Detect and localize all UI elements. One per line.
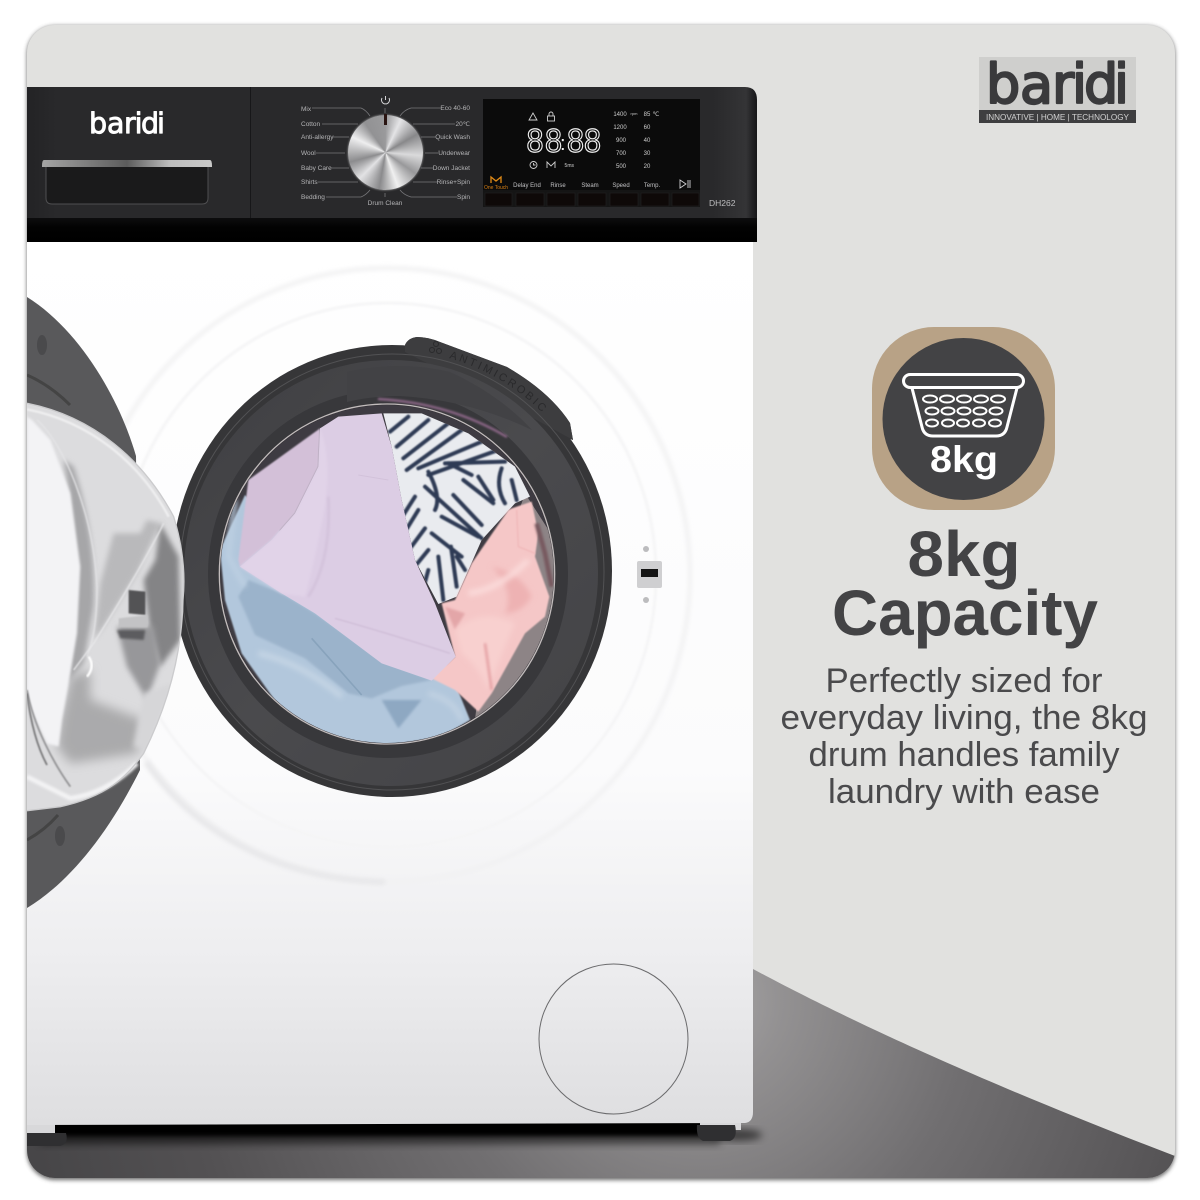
time digits: 8 [567,122,584,159]
logo tagline: INNOVATIVE | HOME | TECHNOLOGY [986,113,1130,122]
programme labels: Eco 40-60 [440,105,470,112]
programme labels: Anti-allergy [301,134,334,141]
icon: power [382,96,390,104]
speed values: 500 [616,164,627,170]
antimicrobic label: ANTIMICROBIC [449,352,546,411]
machine feet [27,1123,741,1146]
time digits: : [560,133,566,155]
machine body [27,240,753,1125]
icon: one touch [491,177,501,183]
description text: drum handles family [808,736,1120,774]
speed values: 30 [644,151,651,157]
programme lines [312,108,457,197]
heading [832,518,1098,649]
programme labels: Drum Clean [368,200,403,207]
basket [904,374,1024,436]
display icons [529,112,555,168]
model number: DH262 [709,198,736,208]
speed values [565,111,660,170]
programme labels: Bedding [301,194,325,201]
time digits: 8 [584,122,601,159]
programme labels: Mix [301,106,312,113]
floor curve [27,969,1175,1178]
glass door [27,403,184,811]
description text: Perfectly sized for [826,662,1102,700]
programme labels [301,105,471,207]
button labels: One Touch [484,185,508,191]
detergent drawer [42,160,212,204]
description text [780,662,1148,811]
speed values: 5ms [565,163,574,169]
programme labels: Cotton [301,121,321,128]
icon: start pause [680,180,690,188]
speed values: 20 [644,164,651,170]
logo wordmark: baridi [986,53,1129,116]
programme labels: Baby Care [301,165,332,172]
speed values: ℃ [653,112,660,118]
door interior reflections [57,460,180,763]
programme labels: Rinse+Spin [437,179,470,186]
speed values: 60 [644,125,651,131]
lavender garment [238,413,456,681]
time digits: 8 [545,122,562,159]
brand logo [979,53,1136,123]
description text: everyday living, the 8kg [780,699,1148,737]
button labels: Steam [581,183,599,189]
programme labels: Shirts [301,179,318,186]
speed values: rpm [631,111,638,116]
door gasket [176,337,612,797]
service hatch [539,964,688,1114]
touch buttons [485,193,699,206]
speed values: 700 [616,151,627,157]
button labels: Rinse [550,183,566,189]
control dial [348,115,423,190]
panel brand: baridi [89,107,165,140]
striped shirt [383,413,530,604]
programme labels: Quick Wash [435,134,470,141]
door surround rings [86,268,690,882]
programme labels: Spin [457,194,470,201]
time digits: 8 [526,122,544,159]
icon label: 8kg [930,439,998,480]
right-side drum shadows [475,493,555,720]
speed values: 900 [616,138,627,144]
icon: antimicrobic [430,342,442,354]
pink garment [432,502,552,712]
door lock [637,546,662,603]
speed values: 1200 [613,125,627,131]
heading: Capacity [832,577,1098,649]
button labels: Delay End [513,183,541,189]
button labels [484,182,660,189]
description text: laundry with ease [828,773,1100,811]
icon: 8kg laundry basket [872,327,1055,510]
time digits [527,128,600,153]
button labels: Speed [612,183,630,189]
blue garment [220,495,470,747]
programme labels: Underwear [438,150,471,157]
washing machine [27,87,757,1146]
speed values: 85 [644,112,651,118]
programme labels: Wool [301,150,316,157]
display [483,99,700,207]
washer shadow [40,1118,762,1144]
button labels: Temp. [644,183,660,189]
white crescent [27,417,80,747]
heading: 8kg [908,518,1020,590]
control panel [27,87,757,242]
programme labels: Down Jacket [433,165,470,172]
speed values: 1400 [613,112,627,118]
door hinge gasket [27,297,140,908]
drum with laundry [215,400,562,750]
programme labels: 20℃ [455,121,471,128]
glass highlights [27,403,184,811]
speed values: 40 [644,138,651,144]
